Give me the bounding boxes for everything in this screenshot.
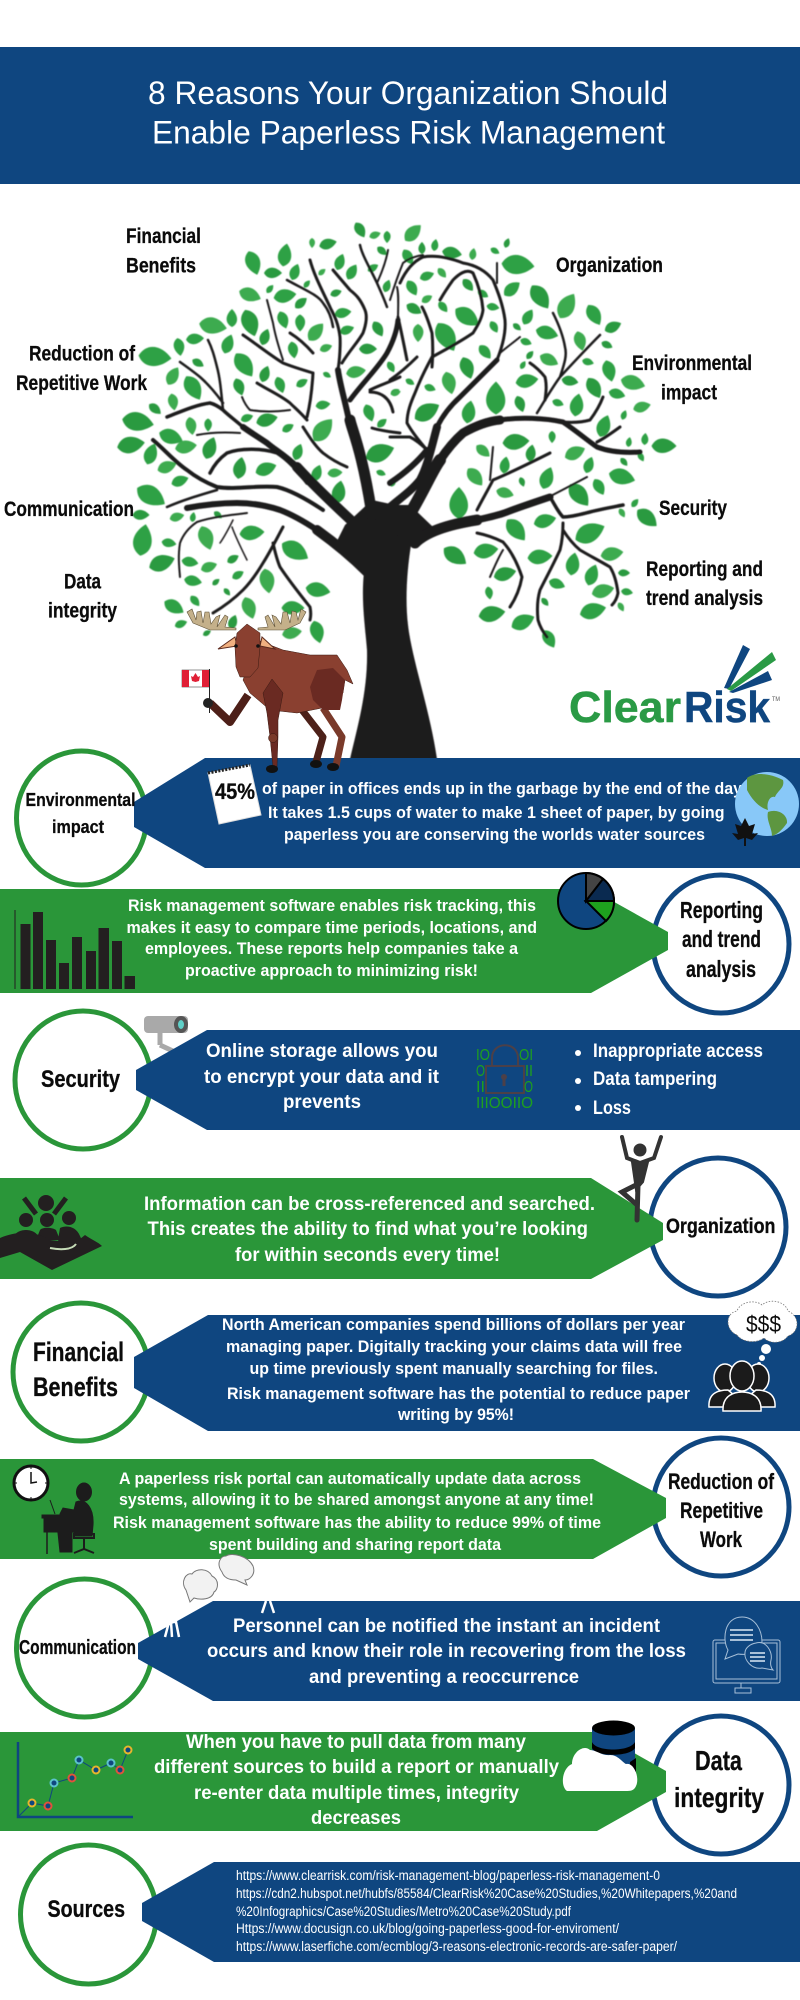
circle: environmental impact [16,751,146,885]
text: cost of paper: managing paper. Digitally tracking your claims data will free [226,1338,682,1356]
circle label: repetitive work: Reduction of [668,1469,775,1494]
text: pulling data: re-enter data multiple times, integrity [194,1783,519,1804]
panel: security [15,1011,800,1149]
trunk [335,500,437,759]
circle label: reporting: analysis [686,956,756,982]
circle: data integrity [653,1716,789,1854]
icon: binary padlock: II [476,1079,485,1096]
circle label: financial benefits: Benefits [33,1372,118,1402]
icon: clock [14,1466,48,1500]
circle label: sources: Sources [48,1896,125,1923]
circle: organization [650,1158,786,1296]
tree labels: trend analysis [646,586,763,610]
icon: globe and maple leaf [732,772,799,846]
list: threats prevented [575,1041,763,1119]
circle label: data integrity: integrity [674,1782,764,1813]
icon: database and cloud [563,1720,637,1791]
text: risk portal: spent building and sharing report data [209,1536,502,1554]
circle label: repetitive work: Repetitive [680,1498,763,1523]
text: cost of paper: writing by 95%! [397,1406,514,1424]
arrow banner: financial [134,1315,800,1431]
tree labels: integrity [48,598,117,622]
body [243,640,353,713]
flag [182,669,210,713]
text: paper statistics: It takes 1.5 cups of water to make 1 sheet of paper, by going [268,804,724,822]
legs [323,708,342,766]
icon: binary padlock [476,1045,533,1112]
illustration: moose holding Canadian flag [182,609,353,773]
haunch [310,668,345,710]
panel: sources [20,1845,800,1984]
icon: binary padlock: OI [519,1047,533,1064]
text: encryption: Online storage allows you [206,1041,438,1062]
circle: communication [16,1579,152,1717]
circle label: organization: Organization [666,1215,776,1238]
tree labels: impact [661,380,717,404]
icon: thought cloud and people: $$$ [746,1311,781,1337]
icon: thought cloud and people [709,1301,797,1411]
circle label: repetitive work: Work [700,1527,743,1552]
text: cost of paper: North American companies spend billions of dollars per year [222,1316,686,1334]
text: risk portal: systems, allowing it to be shared amongst anyone at any time! [119,1491,594,1509]
front leg [263,679,283,767]
text: source URLs: Https://www.docusign.co.uk/blog/going-paperless-good-for-enviroment/ [236,1921,619,1936]
text: cost of paper: Risk management software has the potential to reduce paper [227,1385,691,1403]
arrow banner: data integrity [0,1732,666,1831]
hooves [266,760,339,773]
text: encryption [204,1041,440,1113]
text: pulling data [154,1732,559,1829]
logo: ClearRisk: Clear [569,683,681,732]
panel: financial benefits [13,1301,800,1441]
list: threats prevented: Inappropriate access [593,1041,763,1062]
icon: climbing figure [622,1137,661,1220]
text: cross-referencing [144,1194,595,1266]
icon: person at desk [42,1483,94,1554]
text: incident notifications: Personnel can be notified the instant an incident [233,1616,661,1637]
arm [210,695,248,722]
arrow banner: organization [0,1178,663,1279]
text: risk tracking: proactive approach to minimizing risk! [185,962,478,980]
branches [153,245,640,637]
text: paper statistics: of paper in offices ends up in the garbage by the end of the day [262,780,743,798]
tree labels: Data [64,570,102,594]
text: source URLs: %20Infographics/Case%20Studies/Metro%20Case%20Study.pdf [236,1904,571,1919]
text: encryption: to encrypt your data and it [204,1067,440,1088]
icon: monitor with chat bubbles [713,1617,780,1693]
panel: reduction of repetitive work [0,1438,789,1576]
circle: security [15,1011,151,1149]
text: cost of paper: up time previously spent manually searching for files. [250,1360,658,1378]
text: incident notifications: and preventing a reoccurrence [309,1667,579,1688]
icon: binary padlock: O [524,1079,533,1096]
arrow banner: repetitive work [0,1459,666,1559]
title banner: 8 Reasons Your Organization Should [148,75,668,111]
circle label: reporting: and trend [682,926,761,952]
text: cross-referencing: for within seconds every time! [235,1245,500,1266]
logo: ClearRisk: TM [772,697,780,703]
panel: communication [16,1554,800,1717]
panel: organization [0,1137,786,1296]
title banner [0,47,800,184]
tree labels: Communication [4,497,134,521]
arrow banner: security [136,1030,800,1130]
circle label: repetitive work [668,1469,775,1552]
text: risk portal [113,1470,601,1554]
icon: notepad 45% [208,765,261,824]
tree labels: Reduction of [29,342,136,366]
list: threats prevented: Data tampering [593,1069,717,1090]
text: encryption: prevents [283,1092,361,1113]
circle label: communication: Communication [19,1637,136,1659]
text: risk portal: A paperless risk portal can automatically update data across [119,1470,581,1488]
circle label: data integrity: Data [695,1745,742,1776]
text: cross-referencing: Information can be cross-referenced and searched. [144,1194,595,1215]
tree labels: Benefits [126,254,196,278]
text: source URLs: https://cdn2.hubspot.net/hubfs/85584/ClearRisk%20Case%20Studies,%20Whitepapers,%20and [236,1886,737,1901]
circle label: reporting [680,897,763,982]
icon: binary padlock: II [525,1063,533,1080]
tree labels: Reporting and [646,557,763,581]
ears [218,637,275,649]
circle label: environmental impact [26,789,136,837]
circle label: financial benefits [33,1337,124,1402]
circle label: financial benefits: Financial [33,1337,124,1367]
panel: reporting and trend analysis [0,873,789,1013]
circle: financial benefits [13,1303,149,1441]
circle label: data integrity [674,1745,764,1813]
arrow banner: reporting [0,889,668,993]
icon: binary padlock: IIIOOIIO [476,1095,533,1112]
text: cross-referencing: This creates the ability to find what you’re looking [148,1219,588,1240]
text: incident notifications: occurs and know their role in recovering from the loss [207,1641,686,1662]
antlers [187,609,306,630]
circle: sources [20,1845,156,1984]
circle: reporting and trend analysis [653,875,789,1013]
icon: sketch speech clouds [184,1554,254,1602]
tree labels: Repetitive Work [16,371,147,395]
line chart [18,1742,133,1817]
circle label: environmental impact: impact [52,816,104,837]
tree labels: Financial [126,224,201,248]
circle label: environmental impact: Environmental [26,789,136,810]
arrow banner: communication [138,1601,800,1701]
text: pulling data: decreases [311,1808,401,1829]
list: threats prevented: Loss [593,1098,631,1119]
text: cost of paper [222,1316,691,1424]
icon: notepad 45%: 45% [215,779,255,804]
logo: ClearRisk: Risk [684,683,770,732]
text: risk portal: Risk management software has the ability to reduce 99% of time [113,1514,601,1532]
tree labels: Organization [556,253,663,277]
text: paper statistics [262,780,743,844]
text: source URLs: https://www.laserfiche.com/ecmblog/3-reasons-electronic-records-are-safer-paper/ [236,1939,677,1954]
bar chart [14,910,135,989]
text: source URLs [236,1868,737,1954]
logo: ClearRisk [569,645,780,732]
text: source URLs: https://www.clearrisk.com/risk-management-blog/paperless-risk-management-0 [236,1868,660,1883]
text: risk tracking: Risk management software enables risk tracking, this [128,897,536,915]
arrow banner: sources [142,1862,800,1962]
circle: reduction of repetitive work [653,1438,789,1576]
arrow banner: environmental impact [134,758,800,868]
icon: binary padlock: O [476,1063,485,1080]
icon: security camera [144,1016,188,1052]
icon: binary padlock: IO [476,1047,490,1064]
text: risk tracking [126,897,537,980]
tree labels: Environmental [632,351,752,375]
pie chart [558,873,614,929]
head [235,624,260,677]
text: paper statistics: paperless you are conserving the worlds water sources [284,826,705,844]
text: pulling data: different sources to build a report or manually [154,1757,559,1778]
panel: environmental impact [16,751,800,885]
icon: hand holding people [0,1195,102,1270]
tree labels [4,224,763,622]
text: incident notifications [207,1616,686,1688]
tree labels: Security [659,496,727,520]
text: risk tracking: employees. These reports help companies take a [145,940,519,958]
circle label: reporting: Reporting [680,897,763,923]
speech ticks [165,1601,274,1637]
illustration: tree with green leaves [116,220,677,759]
text: risk tracking: makes it easy to compare time periods, locations, and [126,919,537,937]
panel: data integrity [0,1716,789,1854]
title banner: Enable Paperless Risk Management [152,114,665,150]
text: pulling data: When you have to pull data from many [186,1732,526,1753]
circle label: security: Security [41,1066,121,1093]
